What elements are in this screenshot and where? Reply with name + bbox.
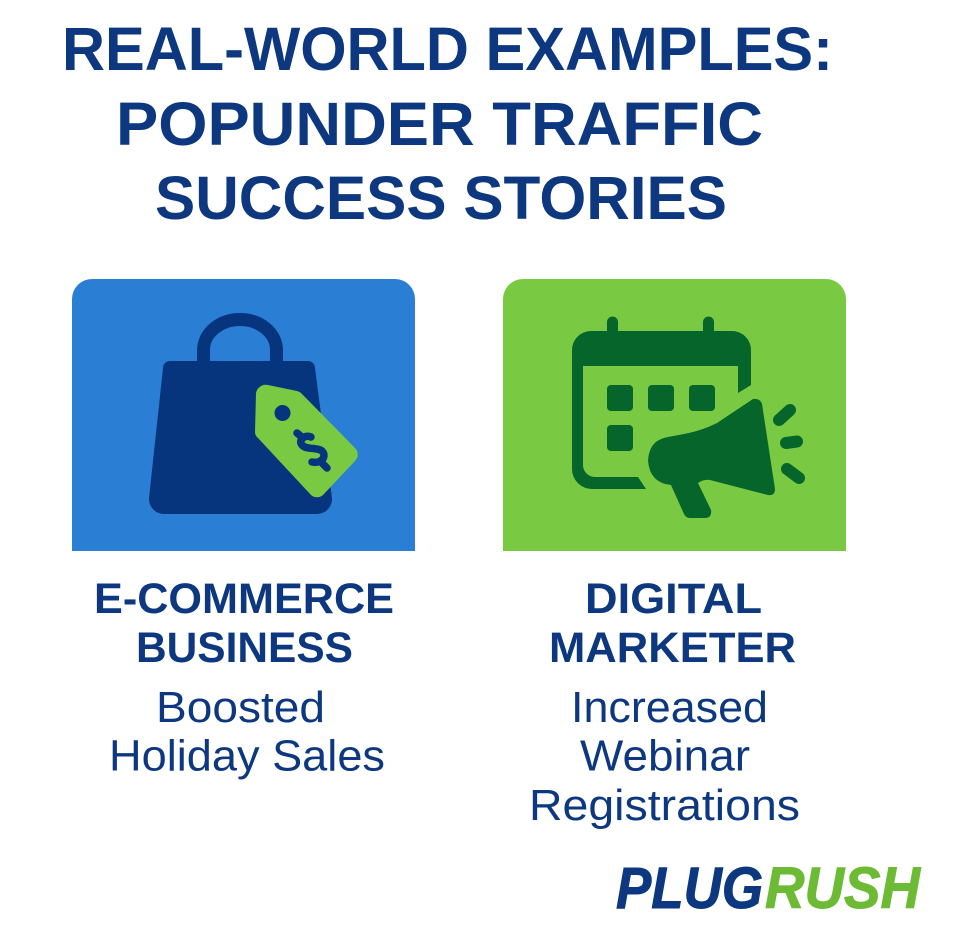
calendar frame bbox=[572, 316, 751, 489]
green icon panel bbox=[503, 279, 846, 551]
digital marketer heading: DIGITAL bbox=[585, 576, 762, 623]
e-commerce description bbox=[109, 684, 385, 780]
dollar sign bbox=[297, 433, 327, 468]
title: POPUNDER TRAFFIC bbox=[116, 90, 763, 159]
e-commerce description: Holiday Sales bbox=[109, 732, 385, 780]
digital marketer description: Increased bbox=[571, 684, 768, 732]
title bbox=[62, 15, 833, 233]
digital marketer description bbox=[529, 684, 800, 830]
megaphone sound lines bbox=[779, 410, 799, 478]
bag handle bbox=[204, 320, 276, 365]
logo: PlugRush: PLUG bbox=[616, 856, 763, 921]
icon: calendar with megaphone bbox=[572, 316, 799, 518]
tag hole bbox=[274, 405, 290, 421]
title: REAL-WORLD EXAMPLES: bbox=[62, 15, 833, 84]
price tag bbox=[255, 385, 358, 497]
e-commerce heading bbox=[94, 576, 394, 672]
logo: PlugRush bbox=[616, 856, 921, 921]
bag body bbox=[149, 361, 332, 514]
e-commerce heading: E-COMMERCE bbox=[94, 576, 394, 623]
digital marketer heading bbox=[549, 576, 796, 672]
e-commerce description: Boosted bbox=[156, 684, 325, 732]
logo: PlugRush: RUSH bbox=[765, 856, 921, 921]
digital marketer heading: MARKETER bbox=[549, 625, 796, 672]
panel: digital marketer bbox=[503, 279, 846, 830]
megaphone bbox=[648, 399, 775, 518]
digital marketer description: Webinar bbox=[580, 732, 750, 780]
blue icon panel bbox=[72, 279, 415, 551]
icon: shopping bag with price tag bbox=[149, 320, 358, 514]
e-commerce heading: BUSINESS bbox=[136, 625, 353, 672]
digital marketer description: Registrations bbox=[529, 782, 800, 830]
panel: e-commerce business bbox=[72, 279, 415, 780]
title: SUCCESS STORIES bbox=[155, 164, 727, 233]
calendar day squares bbox=[607, 385, 715, 451]
